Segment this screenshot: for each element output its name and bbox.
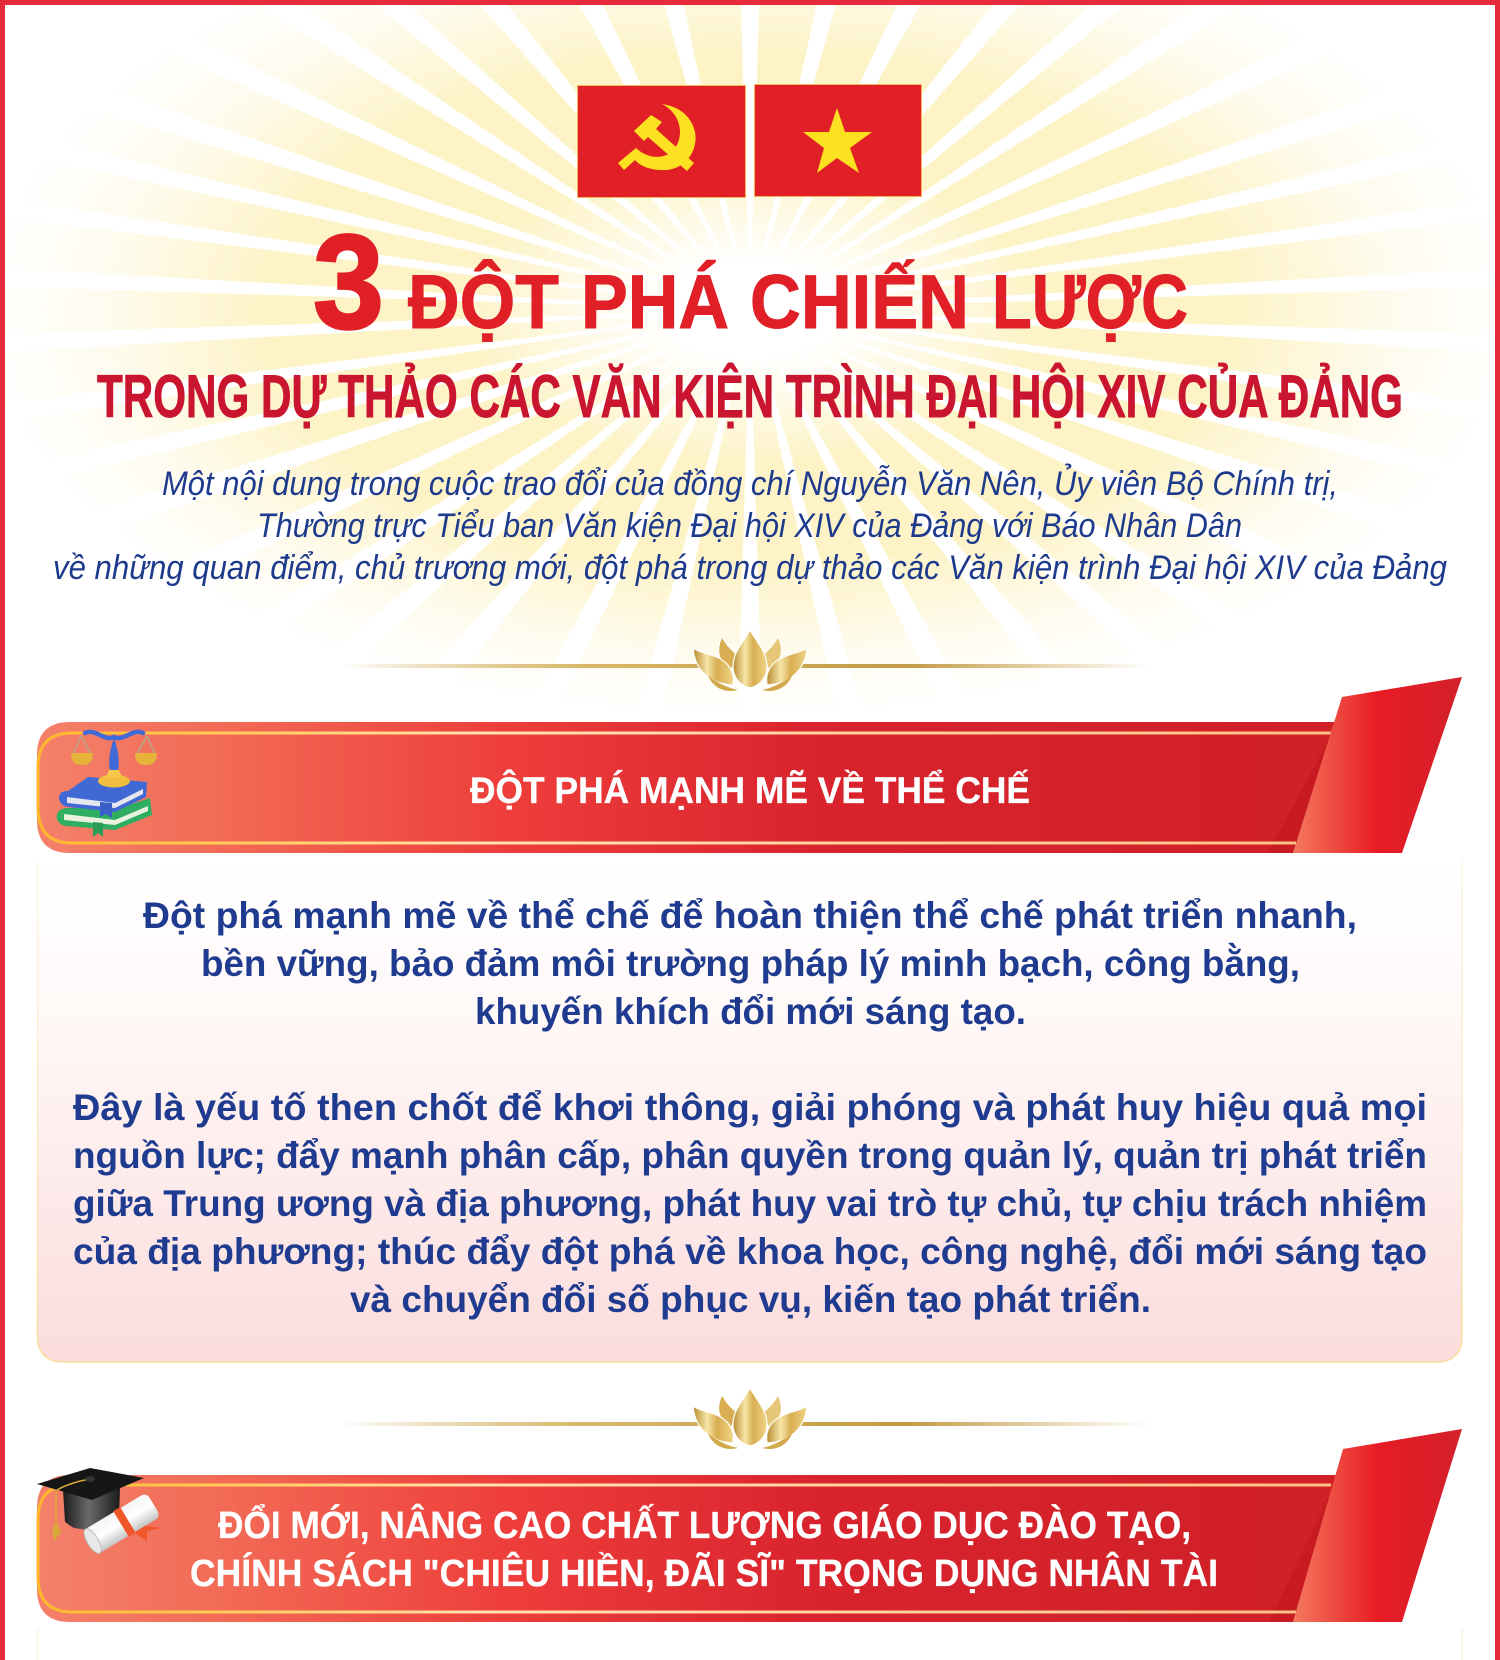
panel 1 text: của địa phương; thúc đẩy đột phá về khoa học, công nghệ, đổi mới sáng tạo [73, 1231, 1427, 1272]
divider with gold lotus [340, 630, 1150, 691]
second divider with gold lotus [340, 1388, 1150, 1449]
panel 1 text: giữa Trung ương và địa phương, phát huy vai trò tự chủ, tự chịu trách nhiệm [73, 1183, 1427, 1224]
title: 3 đột phá chiến lược: ĐỘT [408, 260, 559, 345]
banner 2 heading: ĐỔI MỚI, NÂNG CAO CHẤT LƯỢNG GIÁO DỤC ĐÀO TẠO, [218, 1502, 1191, 1547]
banner 1 [37, 677, 1462, 853]
banner 1 fold shadow [1268, 733, 1332, 853]
banner 1 ribbon [1293, 677, 1462, 853]
banner 1 gold line [38, 733, 1331, 843]
panel 1 background [38, 860, 1462, 1362]
banner 2 heading [190, 1502, 1218, 1595]
banner 2 gold line [38, 1485, 1331, 1612]
banner 1 heading: ĐỘT PHÁ MẠNH MẼ VỀ THỂ CHẾ [470, 769, 1030, 811]
panel: institutional breakthrough [38, 860, 1462, 1362]
panel 1 text: bền vững, bảo đảm môi trường pháp lý minh bạch, công bằng, [201, 942, 1300, 984]
panel 2 background [38, 1628, 1462, 1660]
panel 2 clipped first line of text [96, 1657, 1283, 1660]
intro text: Một nội dung trong cuộc trao đổi của đồng chí Nguyễn Văn Nên, Ủy viên Bộ Chính trị, [162, 464, 1338, 503]
title: 3 đột phá chiến lược: CHIẾN [750, 260, 969, 345]
panel 1 text [73, 895, 1427, 1320]
panel 1 text: Đây là yếu tố then chốt để khơi thông, giải phóng và phát huy hiệu quả mọi [73, 1087, 1427, 1128]
icon: scales on books [57, 732, 157, 837]
banner 2 body [37, 1475, 1336, 1622]
panel 1 text: khuyến khích đổi mới sáng tạo. [475, 991, 1026, 1032]
banner 2 fold shadow [1269, 1490, 1332, 1622]
panel 1 text: và chuyển đổi số phục vụ, kiến tạo phát triển. [350, 1279, 1151, 1320]
intro text: Thường trực Tiểu ban Văn kiện Đại hội XIV của Đảng với Báo Nhân Dân [257, 507, 1242, 545]
title: 3 đột phá chiến lược: 3 [313, 208, 384, 357]
intro text [53, 464, 1447, 587]
national flag [754, 84, 922, 196]
banner 1 body [37, 722, 1336, 853]
sunburst background [0, 0, 1500, 760]
party flag [578, 86, 746, 198]
banner 2 ribbon [1293, 1429, 1462, 1622]
banner 2 heading: CHÍNH SÁCH "CHIÊU HIỀN, ĐÃI SĨ" TRỌNG DỤNG NHÂN TÀI [190, 1551, 1218, 1595]
banner 2 [37, 1429, 1462, 1622]
panel 1 text: Đột phá mạnh mẽ về thể chế để hoàn thiện thể chế phát triển nhanh, [143, 895, 1357, 936]
panel: education and talent [38, 1628, 1462, 1660]
title: 3 đột phá chiến lược: PHÁ [581, 260, 729, 345]
icon: graduation cap and diploma [37, 1468, 161, 1557]
title: 3 đột phá chiến lược [313, 208, 1188, 357]
panel 1 text: nguồn lực; đẩy mạnh phân cấp, phân quyền trong quản lý, quản trị phát triển [73, 1135, 1427, 1176]
title: 3 đột phá chiến lược: LƯỢC [992, 260, 1188, 345]
